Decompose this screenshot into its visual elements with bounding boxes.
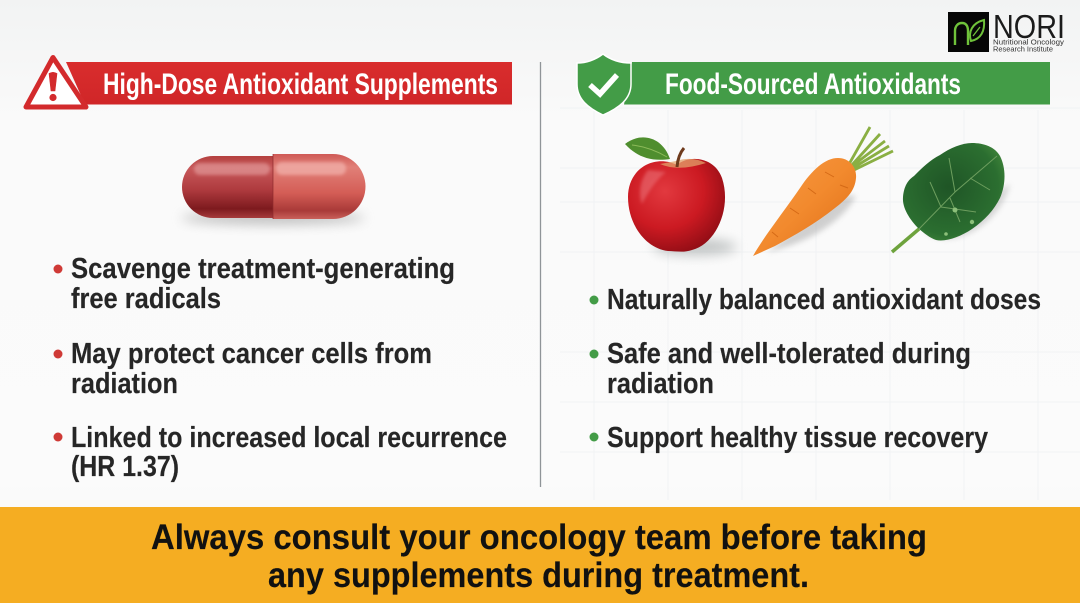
heading banner: supplements: High-Dose Antioxidant Supplements bbox=[103, 68, 498, 101]
bullet: may protect cancer cells bbox=[54, 338, 432, 400]
bullet: increased local recurrence: Linked to increased local recurrence bbox=[71, 422, 507, 454]
bullet: scavenge free radicals: free radicals bbox=[71, 283, 221, 315]
logo mark bbox=[948, 12, 989, 52]
bullet: may protect cancer cells: radiation bbox=[71, 368, 178, 400]
icon: warning triangle bbox=[26, 58, 86, 107]
heading banner: supplements bbox=[66, 62, 512, 104]
bullet: scavenge free radicals bbox=[54, 253, 455, 315]
callout: consult your oncology team: Always consult your oncology team before taking bbox=[151, 517, 927, 557]
bullet: scavenge free radicals: Scavenge treatment-generating bbox=[71, 253, 455, 285]
illustration: carrot bbox=[753, 127, 893, 256]
bullet: increased local recurrence bbox=[54, 422, 507, 483]
icon: red capsule bbox=[181, 154, 366, 224]
bullet list: food bbox=[590, 284, 1041, 454]
illustration: red apple bbox=[625, 137, 737, 255]
heading banner: food-sourced: Food-Sourced Antioxidants bbox=[665, 68, 961, 101]
bullet: may protect cancer cells: May protect cancer cells from bbox=[71, 338, 432, 370]
logo: NORI: NORI bbox=[993, 8, 1065, 45]
bullet list: supplements bbox=[54, 253, 507, 483]
bullet: tissue recovery: Support healthy tissue recovery bbox=[607, 422, 988, 454]
bullet: safe and well-tolerated: radiation bbox=[607, 368, 714, 400]
callout: consult your oncology team bbox=[0, 507, 1080, 603]
callout: consult your oncology team: any supplements during treatment. bbox=[268, 555, 809, 595]
panel: food-sourced antioxidants bbox=[577, 54, 1050, 454]
logo: NORI: Nutritional Oncology bbox=[993, 38, 1064, 46]
illustration: spinach leaf bbox=[892, 143, 1010, 252]
bullet: safe and well-tolerated bbox=[590, 338, 971, 400]
logo: NORI bbox=[948, 8, 1065, 54]
bullet: safe and well-tolerated: Safe and well-tolerated during bbox=[607, 338, 971, 370]
logo: NORI: Research Institute bbox=[993, 44, 1053, 54]
panel: high-dose antioxidant supplements bbox=[26, 58, 512, 483]
bullet: increased local recurrence: (HR 1.37) bbox=[71, 451, 179, 483]
icon: green shield with check bbox=[577, 54, 631, 115]
